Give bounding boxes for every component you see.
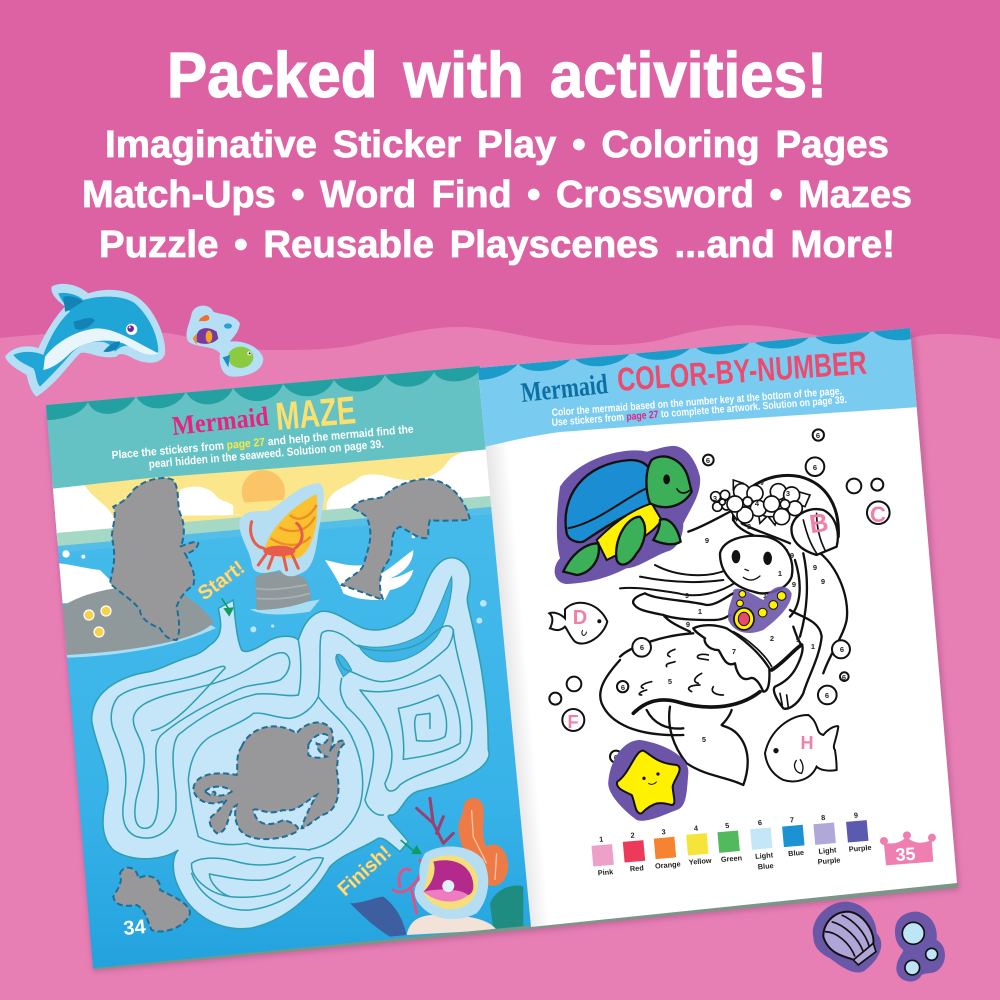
scallops [478,328,911,380]
sticker: hermit crab [239,483,324,576]
sticker: star [608,740,688,821]
sticker: turtle [555,446,700,584]
clouds [33,447,500,603]
number labels: 9 [813,563,817,572]
sticker: shell [813,902,881,973]
sticker: three fish [186,306,263,377]
swatch: green [717,820,743,864]
number labels: 2 [770,634,774,643]
fish H [765,715,838,781]
number labels: 7 [732,647,736,656]
number labels: 6 [706,456,710,465]
crown page number 35 [880,831,936,865]
panel: right page coloring [470,320,970,940]
swatch: green: 5 [725,821,730,830]
heading: Mermaid MAZE [172,396,356,435]
arrow: start [222,598,234,617]
reef: bottom right [350,798,523,937]
swatch: light blue: Blue [757,861,774,871]
number labels: 9 [792,580,796,589]
background: darker pink wave band [0,0,1000,350]
silhouette: octopus [193,723,345,839]
label: Start: Start! [194,557,249,605]
hip fin [693,625,769,692]
flowing hair [620,565,737,595]
number labels: 6 [842,673,846,682]
instructions: Color the mermaid based on the number key at the bottom of the page. [551,385,842,419]
header background [470,320,920,448]
instructions: Place the stickers from page 27 and help the mermaid find the [111,424,414,462]
center rock column and water splashes [250,550,487,632]
pink letter labels: B [807,507,830,539]
sticker: mermaid silhouette [110,478,198,640]
number labels: 6 [840,645,844,654]
swatch: purple: 9 [853,811,858,820]
page number 34: 34 [123,916,147,940]
arrow: finish [401,840,422,854]
number labels: 3 [786,489,790,498]
heading: Mermaid COLOR-BY-NUMBER: Mermaid [519,369,610,409]
pink letter labels: D [573,607,587,629]
swatch: blue [781,814,805,858]
sticker: bubbles [895,912,945,982]
sticker: necklace [728,586,792,633]
activity list [82,124,912,266]
thick waist curve [633,692,760,713]
shell hair piece [791,509,838,555]
instructions: pearl hidden in the seaweed. Solution on page 39. [148,438,384,471]
swatch: orange [652,826,681,871]
flower crown [711,480,810,525]
pink letter labels [568,502,886,753]
mermaid head line art [688,475,847,673]
number labels: 9 [796,635,800,644]
spine shading [486,444,542,927]
scales [639,649,723,695]
number labels: 5 [668,677,672,686]
label: Finish: Finish! [334,842,396,901]
mermaid body line art [620,565,822,713]
sticker: dolphin silhouette [342,479,470,600]
left arm [633,593,733,632]
instructions: Use stickers from page 27 to complete the artwork. Solution on page 39. [551,394,847,429]
arm to hair [688,510,733,532]
swatch: purple [845,810,872,854]
swatch: light purple: Light [818,845,837,856]
swatch: pink [591,834,615,878]
swatch: purple: Purple [848,843,872,854]
number labels: 6 [614,753,618,762]
number labels: 4 [755,499,760,508]
pink letter labels: F [568,712,578,732]
page background [470,360,970,940]
maze walls [111,626,472,910]
number labels: 9 [760,481,764,487]
number labels: 6 [640,643,644,652]
swatch: red: Red [630,863,644,873]
maze path fill [92,558,489,929]
number labels: 9 [685,591,689,600]
face [720,536,792,593]
number labels: 1 [763,591,767,600]
silhouette: coral [113,868,190,931]
swatch: red: 2 [630,831,635,840]
swatch: light purple: 8 [821,813,826,822]
number labels: 1 [778,569,782,578]
number labels [614,431,846,762]
number labels: 1 [811,642,815,651]
number labels: 6 [816,431,820,440]
number labels: 9 [821,577,825,586]
panel: left page header [40,360,490,940]
sticker: dolphin [5,284,165,397]
swatch: light blue [749,817,775,872]
color key [591,810,872,878]
right arm and torso [774,610,822,709]
swatch: pink: 1 [599,835,604,844]
number labels: 3 [713,494,717,503]
title: Packed with activities! [167,39,827,111]
swatch: red [622,830,646,874]
pink letter labels: H [800,733,814,753]
tail top [620,633,693,657]
swatch: light blue: Light [755,850,774,861]
header background [40,360,490,490]
number labels: 9 [747,522,751,531]
number labels: 9 [705,536,709,545]
heading: Mermaid COLOR-BY-NUMBER [520,352,867,402]
number labels: 6 [813,463,817,472]
number labels: 9 [686,620,690,629]
number labels: 5 [702,735,706,744]
scallops [46,366,481,420]
heading: Mermaid MAZE: MAZE [274,389,357,439]
pink letter labels: C [870,502,886,527]
hair back [790,547,847,673]
number labels: 9 [790,551,794,560]
swatch: yellow: Yellow [688,856,712,867]
maze gaps [336,577,452,677]
swatch: blue: 7 [789,815,794,825]
rock flowers [84,606,111,637]
sticker: oyster with pearl [415,846,488,919]
swatch: orange: 3 [661,827,666,837]
activity list: Puzzle • Reusable Playscenes ...and More! [99,224,895,266]
crown page number 35: 35 [895,844,916,865]
maze [92,558,523,937]
number labels: 6 [825,691,829,700]
heading: Mermaid COLOR-BY-NUMBER: COLOR-BY-NUMBER [616,344,868,398]
swatch: orange: Orange [655,859,681,871]
swatch: yellow [685,823,712,867]
swatch: light purple [813,812,841,866]
panel: left page maze [46,366,531,968]
swatch: green: Green [721,853,743,864]
swatch: light purple: Purple [817,855,841,866]
sky [52,452,492,542]
page background [46,366,531,968]
bubbles with numbers [549,429,890,763]
book shadow [46,335,960,972]
fish D [549,603,607,644]
number labels: 6 [621,683,625,692]
swatch: light blue: 6 [757,818,762,827]
activity list: Imaginative Sticker Play • Coloring Pages [105,124,889,166]
swatch: pink: Pink [597,867,615,877]
head cap [733,475,838,537]
activity list: Match-Ups • Word Find • Crossword • Mazes [82,174,912,216]
book page thickness [93,880,958,970]
mermaid tail line art [600,660,748,785]
swatch: yellow: 4 [693,823,699,833]
left rock [55,586,214,655]
foam under rock [66,625,216,658]
number labels: 1 [698,607,702,616]
heading: Mermaid MAZE: Mermaid [170,401,270,441]
swatch: blue: Blue [788,848,804,858]
